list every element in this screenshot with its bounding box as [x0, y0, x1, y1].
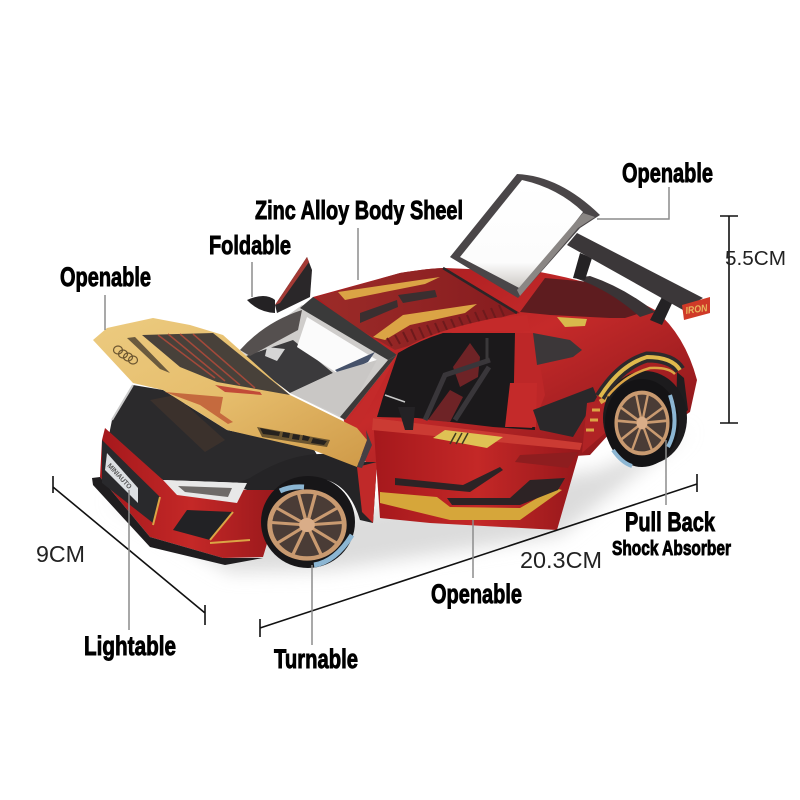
wing end plate	[682, 297, 710, 320]
label: Openable, hood: Openable	[60, 262, 151, 292]
A-pillar and roof rail	[347, 315, 530, 425]
rear bumper shading	[676, 372, 688, 422]
dimension: height line	[720, 216, 738, 423]
rear wheel arch and wheel	[600, 357, 687, 467]
label: Turnable: Turnable	[274, 644, 358, 674]
dimension: width line	[53, 476, 205, 625]
opened rear hatch window	[450, 174, 600, 298]
label: Lightable: Lightable	[84, 631, 176, 661]
car illustration	[92, 174, 710, 568]
front splitter	[92, 477, 263, 565]
headlight	[163, 480, 247, 503]
main body	[313, 268, 697, 470]
license plate: MINIAUTO	[106, 463, 133, 491]
front wheel	[261, 476, 355, 568]
cabin interior	[377, 333, 535, 430]
hood vents	[257, 427, 330, 447]
opened hood	[93, 318, 372, 468]
dimension label: 20.3CM: 20.3CM	[520, 547, 602, 573]
label: Openable, window: Openable	[622, 158, 713, 188]
grille	[102, 440, 160, 523]
dimension: length line	[260, 474, 697, 637]
dimension label: 5.5CM: 5.5CM	[725, 248, 786, 270]
wing	[567, 233, 710, 325]
dimension label: 9CM: 9CM	[36, 541, 85, 567]
foldable far door	[275, 257, 312, 313]
ground shadow	[110, 430, 690, 572]
label: Foldable: Foldable	[209, 230, 291, 260]
callout lines	[105, 187, 669, 645]
engine bay	[108, 385, 320, 483]
label: Shock Absorber: Shock Absorber	[612, 538, 731, 560]
engine bay window	[150, 395, 225, 452]
label: Pull Back: Pull Back	[625, 507, 716, 537]
label: Openable, door: Openable	[431, 579, 522, 609]
door mirror	[398, 407, 415, 430]
hood logo rings	[114, 346, 138, 364]
wing end plate: IRON	[685, 303, 709, 317]
wing mirror	[247, 296, 275, 313]
rear quarter panels	[505, 317, 618, 453]
lower intake	[173, 510, 233, 540]
label: Zinc Alloy Body Sheel: Zinc Alloy Body Sheel	[255, 195, 463, 225]
opened door	[372, 407, 582, 530]
windshield	[240, 297, 397, 420]
engine deck	[520, 278, 650, 318]
license plate	[105, 453, 138, 503]
front fender	[232, 454, 377, 523]
roof graphics	[317, 268, 520, 350]
front bumper	[92, 428, 283, 565]
